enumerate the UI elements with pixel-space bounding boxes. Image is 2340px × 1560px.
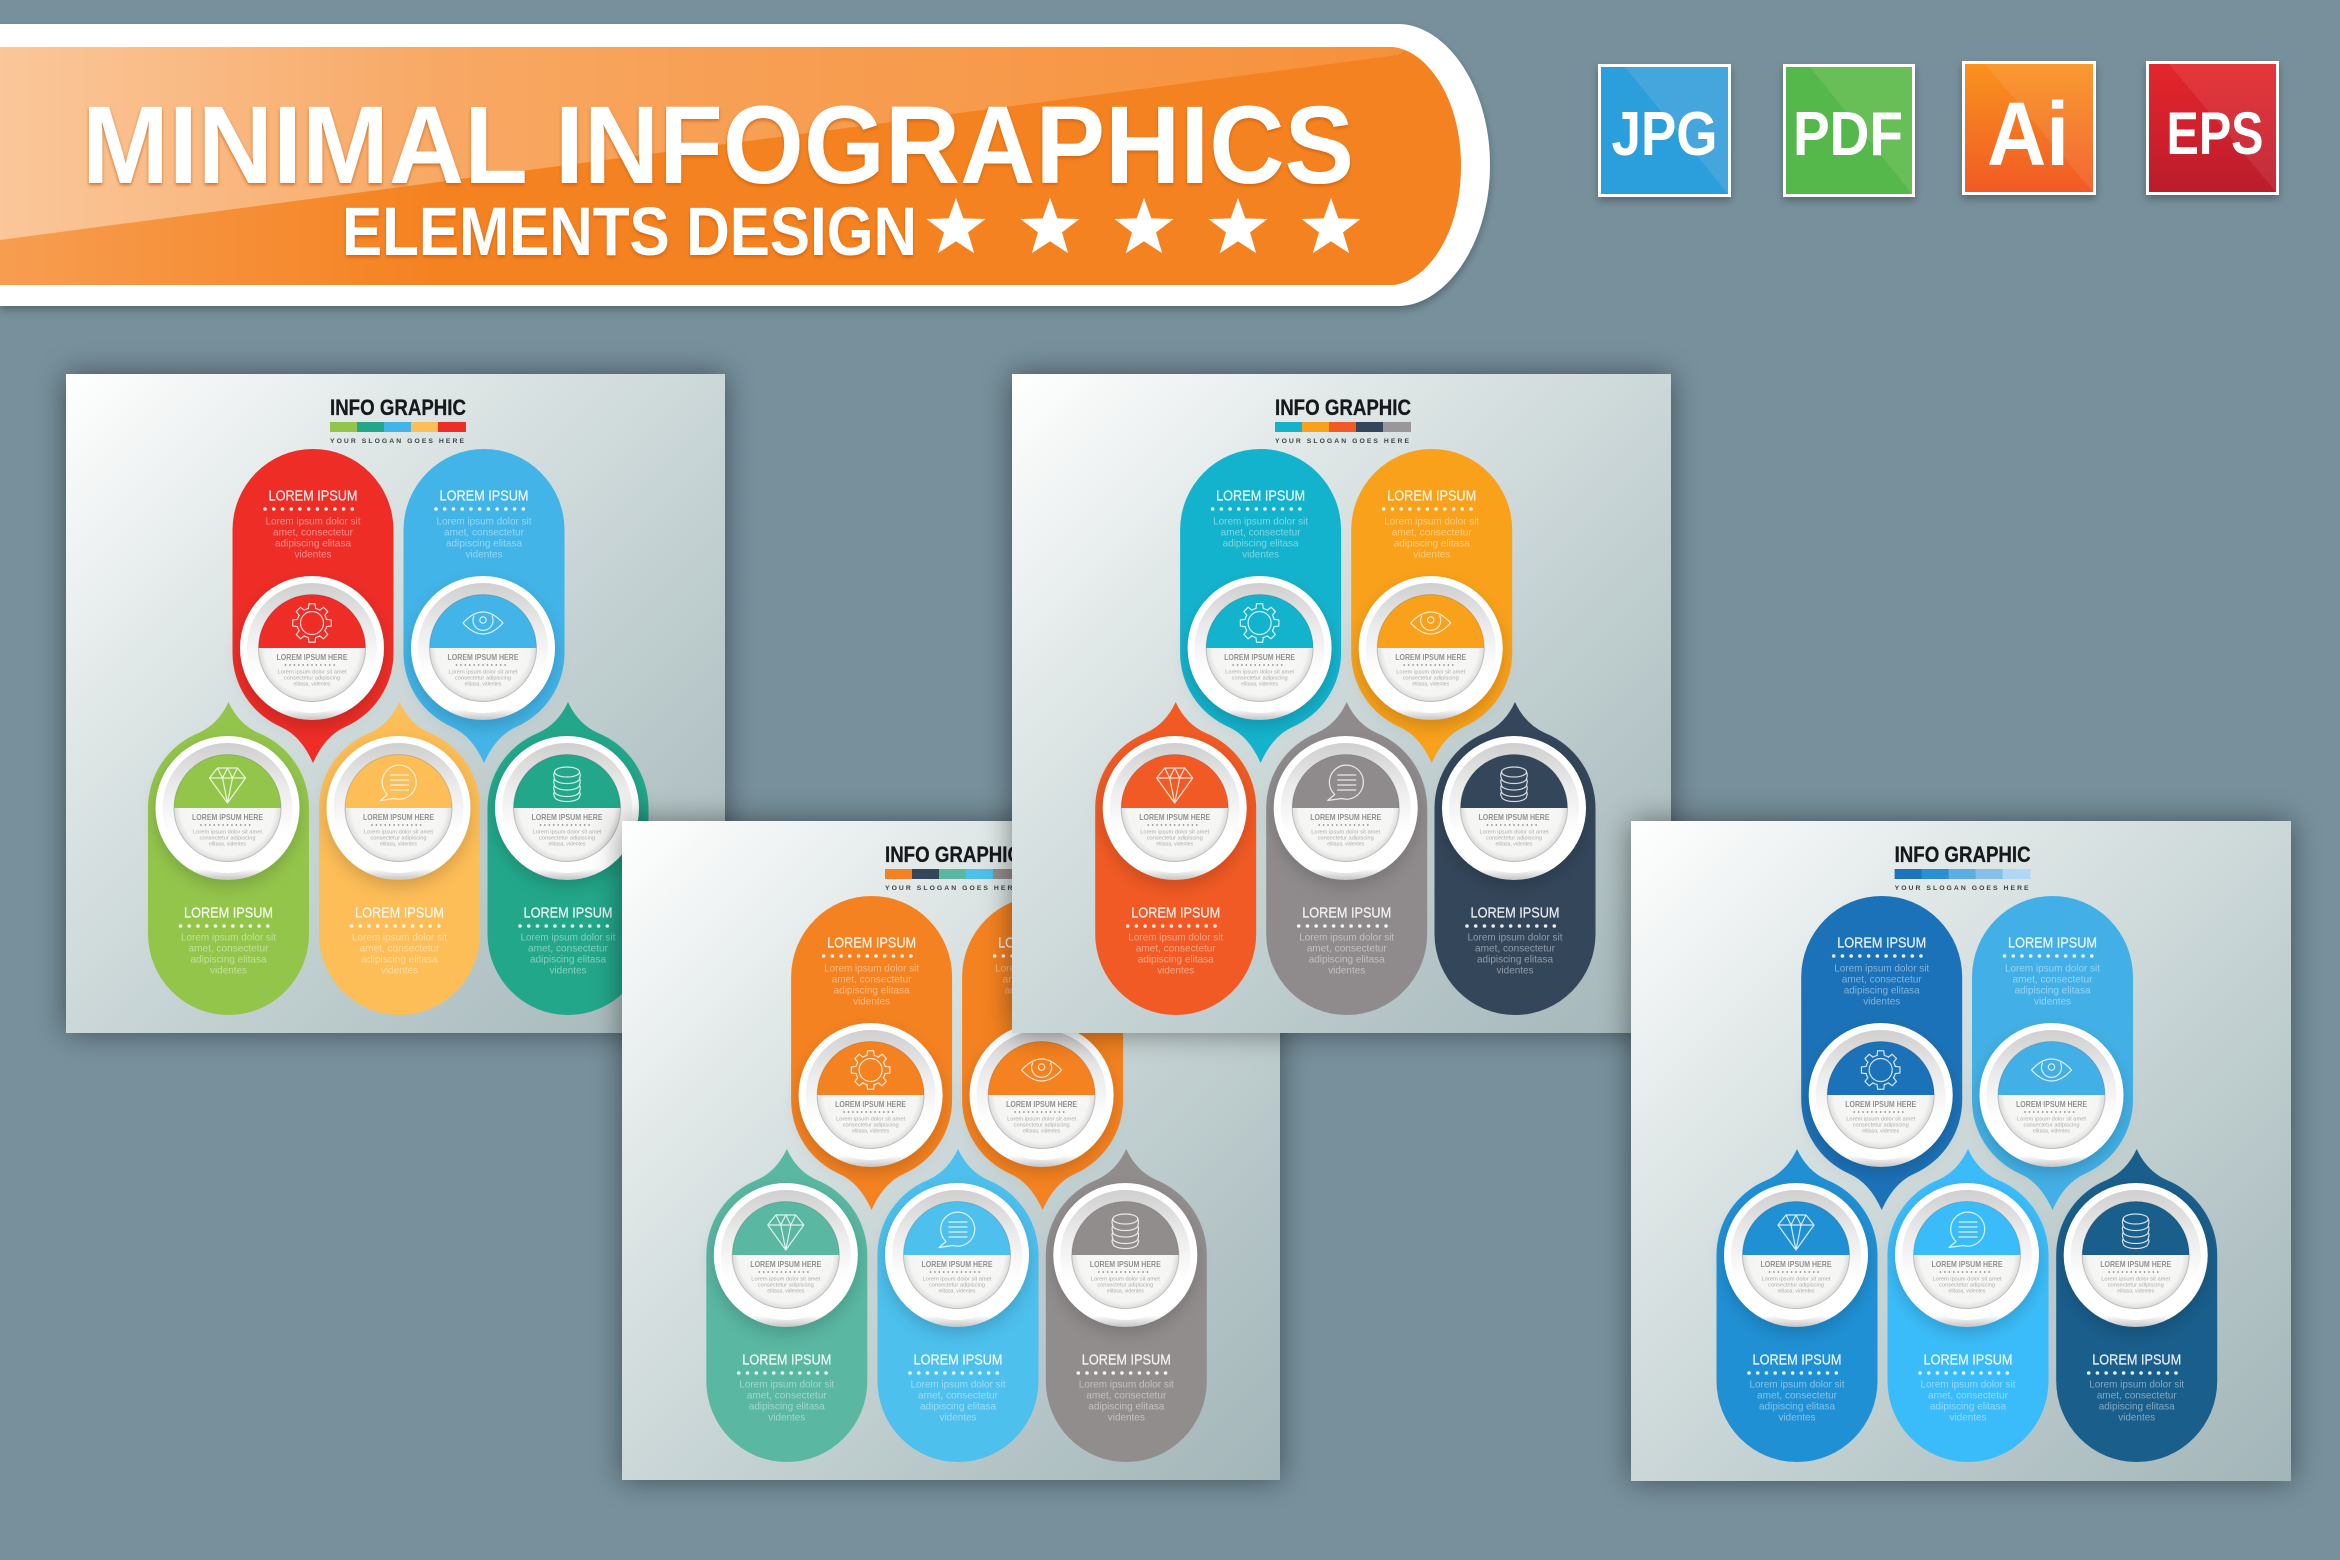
step: teal database pill: Lorem ipsum dolor sit (520, 932, 616, 944)
step: orange eye pill: videntes (1024, 996, 1061, 1008)
step: red gear pill: LOREM IPSUM (268, 488, 358, 504)
banner subtitle: ELEMENTS DESIGN (342, 193, 917, 270)
step: gray chat pill: Lorem ipsum dolor sit (1299, 932, 1394, 944)
step: seafoam diamond pill: Lorem ipsum dolor sit (739, 1380, 834, 1390)
step: green diamond pill: Lorem ipsum dolor sit (181, 932, 276, 944)
panel: infographic variant 4, blues (1631, 821, 2291, 1481)
step: blue eye pill: LOREM IPSUM (440, 488, 528, 504)
panel heading (1895, 842, 2031, 892)
step: dark blue database pill: consectetur adipiscing (2108, 1282, 2164, 1288)
step: red gear pill: amet, consectetur (273, 528, 354, 538)
step: sky blue chat pill: LOREM IPSUM (914, 1352, 1002, 1368)
step: orange eye pill: amet, consectetur (1003, 974, 1083, 986)
step: amber eye pill: LOREM IPSUM HERE (1395, 652, 1467, 662)
step: orange eye pill: LOREM IPSUM HERE (1006, 1099, 1077, 1109)
step: seafoam diamond pill: adipiscing elitasa (749, 1402, 825, 1412)
step: royal blue gear pill: adipiscing elitasa (1844, 986, 1920, 996)
step: yellow chat pill: Lorem ipsum dolor sit amet (364, 830, 434, 836)
step: gray database pill: elitasa, videntes (1107, 1288, 1144, 1294)
step: medium blue diamond pill: LOREM IPSUM (1752, 1352, 1842, 1368)
step: gray database pill: adipiscing elitasa (1088, 1402, 1165, 1412)
panel: infographic variant 2, cyan and amber (1012, 374, 1671, 1033)
step: light blue eye pill (1972, 896, 2133, 1210)
step: bright blue chat pill: Lorem ipsum dolor sit (1920, 1380, 2016, 1390)
step: green diamond pill: consectetur adipiscing (200, 836, 255, 842)
step: cyan gear pill: consectetur adipiscing (1232, 676, 1288, 682)
step: blue eye pill: adipiscing elitasa (446, 538, 522, 550)
step: bright blue chat pill (1888, 1149, 2048, 1462)
step: navy database pill: adipiscing elitasa (1477, 954, 1553, 966)
icon: EPS file badge (2146, 61, 2279, 195)
panel heading: INFO GRAPHIC (330, 395, 466, 420)
panel: infographic variant 1, multicolor (66, 374, 725, 1033)
step: red-orange diamond pill: Lorem ipsum dolor sit amet (1140, 830, 1210, 836)
step: medium blue diamond pill: LOREM IPSUM HERE (1760, 1259, 1832, 1269)
panel heading (885, 842, 1021, 892)
step: cyan gear pill: elitasa, videntes (1241, 682, 1278, 688)
step: green diamond pill: elitasa, videntes (209, 842, 246, 848)
step: bright blue chat pill: Lorem ipsum dolor sit amet (1932, 1276, 2002, 1282)
step: dark blue database pill: videntes (2118, 1412, 2155, 1424)
step: navy database pill: videntes (1496, 966, 1534, 976)
icon: Ai file badge (1962, 61, 2096, 195)
step: light blue eye pill: videntes (2034, 996, 2071, 1008)
step: seafoam diamond pill: Lorem ipsum dolor sit amet (751, 1276, 821, 1282)
step: teal database pill (488, 702, 648, 1015)
step: yellow chat pill: elitasa, videntes (380, 842, 417, 848)
step: blue eye pill: amet, consectetur (444, 528, 525, 538)
panel heading: INFO GRAPHIC (885, 842, 1021, 867)
step: orange eye pill: Lorem ipsum dolor sit amet (1007, 1116, 1077, 1122)
step: blue eye pill (404, 449, 564, 763)
step: royal blue gear pill: elitasa, videntes (1862, 1128, 1899, 1134)
step: gray database pill: Lorem ipsum dolor sit amet (1091, 1276, 1160, 1282)
step: navy database pill: Lorem ipsum dolor sit amet (1480, 830, 1549, 836)
step: orange eye pill: LOREM IPSUM (998, 934, 1087, 952)
step: dark blue database pill: amet, consectetur (2097, 1390, 2177, 1402)
step: yellow chat pill: consectetur adipiscing (371, 836, 426, 842)
step: amber eye pill: LOREM IPSUM (1387, 488, 1476, 504)
step: amber eye pill: consectetur adipiscing (1403, 676, 1459, 682)
step: sky blue chat pill: adipiscing elitasa (920, 1402, 996, 1412)
step: green diamond pill: Lorem ipsum dolor sit amet (193, 830, 263, 836)
step: dark blue database pill: elitasa, videntes (2117, 1288, 2154, 1294)
step: dark blue database pill: LOREM IPSUM (2092, 1352, 2181, 1368)
step: yellow chat pill (319, 702, 480, 1015)
step: cyan gear pill: LOREM IPSUM (1216, 488, 1305, 504)
step: gray chat pill: adipiscing elitasa (1309, 954, 1385, 966)
step: royal blue gear pill: videntes (1863, 996, 1900, 1008)
step: orange gear pill: elitasa, videntes (852, 1128, 889, 1134)
step: green diamond pill: LOREM IPSUM (184, 904, 273, 922)
icon: EPS file badge: EPS (2166, 100, 2264, 167)
panel heading (1275, 395, 1411, 445)
step: cyan gear pill: adipiscing elitasa (1223, 538, 1299, 550)
step: royal blue gear pill: amet, consectetur (1842, 974, 1922, 986)
step: medium blue diamond pill: videntes (1778, 1412, 1816, 1424)
step: dark blue database pill: Lorem ipsum dolor sit amet (2101, 1276, 2171, 1282)
step: royal blue gear pill: consectetur adipiscing (1853, 1122, 1909, 1128)
step: cyan gear pill (1180, 449, 1341, 763)
step: amber eye pill: elitasa, videntes (1412, 682, 1449, 688)
step: teal database pill: LOREM IPSUM HERE (532, 812, 603, 822)
step: orange gear pill: videntes (853, 996, 890, 1008)
step: sky blue chat pill: elitasa, videntes (938, 1288, 976, 1294)
step: sky blue chat pill: LOREM IPSUM HERE (922, 1259, 993, 1269)
step: sky blue chat pill: videntes (940, 1412, 976, 1424)
step: light blue eye pill: elitasa, videntes (2033, 1128, 2070, 1134)
step: gray chat pill (1266, 702, 1427, 1015)
step: bright blue chat pill: elitasa, videntes (1948, 1288, 1986, 1294)
step: red-orange diamond pill: LOREM IPSUM (1131, 904, 1220, 922)
step: seafoam diamond pill: consectetur adipiscing (758, 1282, 814, 1288)
step: amber eye pill (1351, 449, 1512, 763)
step: orange gear pill: LOREM IPSUM HERE (835, 1099, 906, 1109)
step: gray database pill: amet, consectetur (1086, 1390, 1167, 1402)
panel: infographic variant 3, orange and teal (622, 821, 1280, 1480)
panel heading: YOUR SLOGAN GOES HERE (885, 885, 1019, 892)
icon: JPG file badge: JPG (1612, 100, 1718, 169)
step: red gear pill: Lorem ipsum dolor sit amet (278, 670, 347, 676)
step: red-orange diamond pill: Lorem ipsum dolor sit (1128, 932, 1223, 944)
step: green diamond pill (148, 702, 309, 1015)
step: red gear pill: consectetur adipiscing (284, 676, 340, 682)
step: gray database pill: videntes (1108, 1412, 1145, 1424)
step: red gear pill: Lorem ipsum dolor sit (266, 516, 361, 528)
five star rating (926, 198, 1360, 253)
step: bright blue chat pill: videntes (1950, 1412, 1986, 1424)
step: green diamond pill: amet, consectetur (188, 944, 269, 954)
step: red-orange diamond pill: adipiscing elitasa (1138, 954, 1214, 966)
step: light blue eye pill: LOREM IPSUM (2008, 934, 2097, 952)
step: cyan gear pill: LOREM IPSUM HERE (1224, 652, 1295, 662)
step: green diamond pill: videntes (210, 966, 247, 976)
step: medium blue diamond pill: Lorem ipsum dolor sit (1750, 1380, 1845, 1390)
step: medium blue diamond pill: elitasa, videntes (1778, 1288, 1815, 1294)
step: yellow chat pill: LOREM IPSUM (355, 904, 444, 922)
step: medium blue diamond pill: Lorem ipsum dolor sit amet (1762, 1276, 1831, 1282)
step: dark blue database pill: Lorem ipsum dolor sit (2089, 1380, 2184, 1390)
step: red gear pill: videntes (294, 550, 332, 560)
step: medium blue diamond pill: amet, consectetur (1757, 1390, 1838, 1402)
step: yellow chat pill: Lorem ipsum dolor sit (352, 932, 447, 944)
banner title: MINIMAL INFOGRAPHICS (82, 84, 1354, 207)
step: royal blue gear pill: LOREM IPSUM HERE (1845, 1099, 1917, 1109)
step: orange gear pill: LOREM IPSUM (827, 934, 916, 952)
step: amber eye pill: Lorem ipsum dolor sit amet (1396, 670, 1466, 676)
step: gray database pill: LOREM IPSUM (1082, 1352, 1171, 1368)
step: navy database pill: consectetur adipiscing (1486, 836, 1542, 842)
step: green diamond pill: adipiscing elitasa (190, 954, 267, 966)
step: medium blue diamond pill: consectetur adipiscing (1768, 1282, 1824, 1288)
panel heading: INFO GRAPHIC (1275, 395, 1411, 420)
step: red-orange diamond pill: LOREM IPSUM HERE (1139, 812, 1211, 822)
step: light blue eye pill: LOREM IPSUM HERE (2016, 1099, 2087, 1109)
step: orange gear pill: consectetur adipiscing (843, 1122, 899, 1128)
step: bright blue chat pill: consectetur adipiscing (1939, 1282, 1995, 1288)
step: seafoam diamond pill: LOREM IPSUM HERE (750, 1259, 822, 1269)
step: amber eye pill: videntes (1413, 550, 1450, 560)
step: orange eye pill: consectetur adipiscing (1014, 1122, 1070, 1128)
step: navy database pill: Lorem ipsum dolor sit (1468, 932, 1563, 944)
step: blue eye pill: elitasa, videntes (464, 682, 502, 688)
step: blue eye pill: LOREM IPSUM HERE (448, 652, 519, 662)
step: gray chat pill: consectetur adipiscing (1318, 836, 1374, 842)
step: orange eye pill (962, 896, 1123, 1210)
panel heading (330, 395, 466, 445)
step: gray database pill (1046, 1149, 1207, 1462)
step: orange gear pill: Lorem ipsum dolor sit (824, 964, 919, 974)
step: gray chat pill: amet, consectetur (1307, 944, 1387, 954)
step: navy database pill (1434, 702, 1596, 1015)
step: orange gear pill: adipiscing elitasa (834, 986, 910, 996)
step: blue eye pill: Lorem ipsum dolor sit (436, 516, 532, 528)
step: teal database pill: amet, consectetur (528, 944, 609, 954)
step: amber eye pill: amet, consectetur (1392, 528, 1472, 538)
step: dark blue database pill: adipiscing elitasa (2099, 1402, 2175, 1412)
step: navy database pill: elitasa, videntes (1496, 842, 1533, 848)
step: royal blue gear pill: Lorem ipsum dolor sit (1834, 964, 1929, 974)
step: seafoam diamond pill: videntes (768, 1412, 805, 1424)
step: red-orange diamond pill: elitasa, videntes (1156, 842, 1193, 848)
step: cyan gear pill: videntes (1242, 550, 1279, 560)
icon: PDF file badge (1783, 64, 1915, 197)
step: seafoam diamond pill: elitasa, videntes (767, 1288, 805, 1294)
step: gray chat pill: videntes (1328, 966, 1365, 976)
step: orange eye pill: adipiscing elitasa (1005, 986, 1081, 996)
step: light blue eye pill: amet, consectetur (2012, 974, 2093, 986)
step: seafoam diamond pill: amet, consectetur (747, 1390, 827, 1402)
step: orange gear pill: amet, consectetur (832, 974, 912, 986)
step: blue eye pill: videntes (466, 550, 502, 560)
step: gray database pill: consectetur adipiscing (1097, 1282, 1153, 1288)
step: dark blue database pill (2056, 1149, 2217, 1462)
icon: JPG file badge (1598, 64, 1731, 197)
step: teal database pill: elitasa, videntes (548, 842, 586, 848)
step: cyan gear pill: Lorem ipsum dolor sit amet (1225, 670, 1295, 676)
step: red-orange diamond pill: amet, consectetur (1136, 944, 1216, 954)
step: red gear pill: LOREM IPSUM HERE (276, 652, 348, 662)
step: light blue eye pill: Lorem ipsum dolor sit (2005, 964, 2100, 974)
step: green diamond pill: LOREM IPSUM HERE (192, 812, 263, 822)
step: teal database pill: LOREM IPSUM (524, 904, 612, 922)
step: teal database pill: consectetur adipiscing (539, 836, 595, 842)
panel heading: YOUR SLOGAN GOES HERE (1275, 438, 1409, 445)
step: gray chat pill: Lorem ipsum dolor sit amet (1311, 830, 1381, 836)
step: royal blue gear pill: LOREM IPSUM (1837, 934, 1926, 952)
panel heading: INFO GRAPHIC (1895, 842, 2031, 867)
step: royal blue gear pill (1801, 896, 1962, 1210)
step: light blue eye pill: adipiscing elitasa (2014, 986, 2091, 996)
step: gray database pill: LOREM IPSUM HERE (1090, 1259, 1161, 1269)
step: sky blue chat pill: Lorem ipsum dolor sit (910, 1380, 1006, 1390)
icon: PDF file badge: PDF (1793, 100, 1903, 169)
step: yellow chat pill: LOREM IPSUM HERE (363, 812, 434, 822)
step: cyan gear pill: Lorem ipsum dolor sit (1213, 516, 1308, 528)
panel heading: YOUR SLOGAN GOES HERE (330, 438, 464, 445)
step: navy database pill: LOREM IPSUM HERE (1478, 812, 1550, 822)
step: bright blue chat pill: LOREM IPSUM HERE (1932, 1259, 2003, 1269)
step: blue eye pill: Lorem ipsum dolor sit amet (448, 670, 518, 676)
step: yellow chat pill: adipiscing elitasa (362, 954, 438, 966)
step: amber eye pill: adipiscing elitasa (1394, 538, 1470, 550)
step: medium blue diamond pill: adipiscing elitasa (1759, 1402, 1835, 1412)
step: yellow chat pill: videntes (381, 966, 418, 976)
step: navy database pill: amet, consectetur (1475, 944, 1556, 954)
step: seafoam diamond pill (706, 1149, 867, 1462)
icon: Ai file badge: Ai (1987, 85, 2069, 185)
step: gray chat pill: LOREM IPSUM (1302, 904, 1391, 922)
step: bright blue chat pill: amet, consectetur (1928, 1390, 2009, 1402)
step: gray chat pill: elitasa, videntes (1327, 842, 1364, 848)
step: gray chat pill: LOREM IPSUM HERE (1310, 812, 1382, 822)
step: orange gear pill: Lorem ipsum dolor sit amet (836, 1116, 906, 1122)
step: orange eye pill: Lorem ipsum dolor sit (995, 964, 1090, 974)
step: royal blue gear pill: Lorem ipsum dolor sit amet (1846, 1116, 1916, 1122)
step: teal database pill: Lorem ipsum dolor sit amet (532, 830, 602, 836)
step: red-orange diamond pill: videntes (1157, 966, 1194, 976)
step: dark blue database pill: LOREM IPSUM HERE (2100, 1259, 2172, 1269)
step: teal database pill: videntes (550, 966, 586, 976)
step: cyan gear pill: amet, consectetur (1221, 528, 1301, 538)
step: teal database pill: adipiscing elitasa (530, 954, 606, 966)
step: sky blue chat pill: Lorem ipsum dolor sit amet (922, 1276, 992, 1282)
step: orange eye pill: elitasa, videntes (1023, 1128, 1060, 1134)
title banner (0, 24, 1490, 306)
panel heading: YOUR SLOGAN GOES HERE (1895, 885, 2029, 892)
step: light blue eye pill: Lorem ipsum dolor sit amet (2017, 1116, 2087, 1122)
step: medium blue diamond pill (1716, 1149, 1878, 1462)
step: seafoam diamond pill: LOREM IPSUM (742, 1352, 831, 1368)
step: navy database pill: LOREM IPSUM (1470, 904, 1560, 922)
step: sky blue chat pill (878, 1149, 1038, 1462)
step: sky blue chat pill: consectetur adipiscing (929, 1282, 985, 1288)
step: red gear pill (232, 449, 394, 763)
step: red gear pill: adipiscing elitasa (275, 538, 351, 550)
step: bright blue chat pill: LOREM IPSUM (1924, 1352, 2012, 1368)
step: yellow chat pill: amet, consectetur (360, 944, 440, 954)
step: blue eye pill: consectetur adipiscing (455, 676, 511, 682)
step: gray database pill: Lorem ipsum dolor sit (1079, 1380, 1174, 1390)
step: sky blue chat pill: amet, consectetur (918, 1390, 999, 1402)
step: orange gear pill (791, 896, 952, 1210)
step: amber eye pill: Lorem ipsum dolor sit (1384, 516, 1479, 528)
step: red gear pill: elitasa, videntes (294, 682, 331, 688)
step: red-orange diamond pill: consectetur adipiscing (1147, 836, 1203, 842)
step: light blue eye pill: consectetur adipiscing (2024, 1122, 2079, 1128)
step: bright blue chat pill: adipiscing elitasa (1930, 1402, 2006, 1412)
step: red-orange diamond pill (1095, 702, 1256, 1015)
